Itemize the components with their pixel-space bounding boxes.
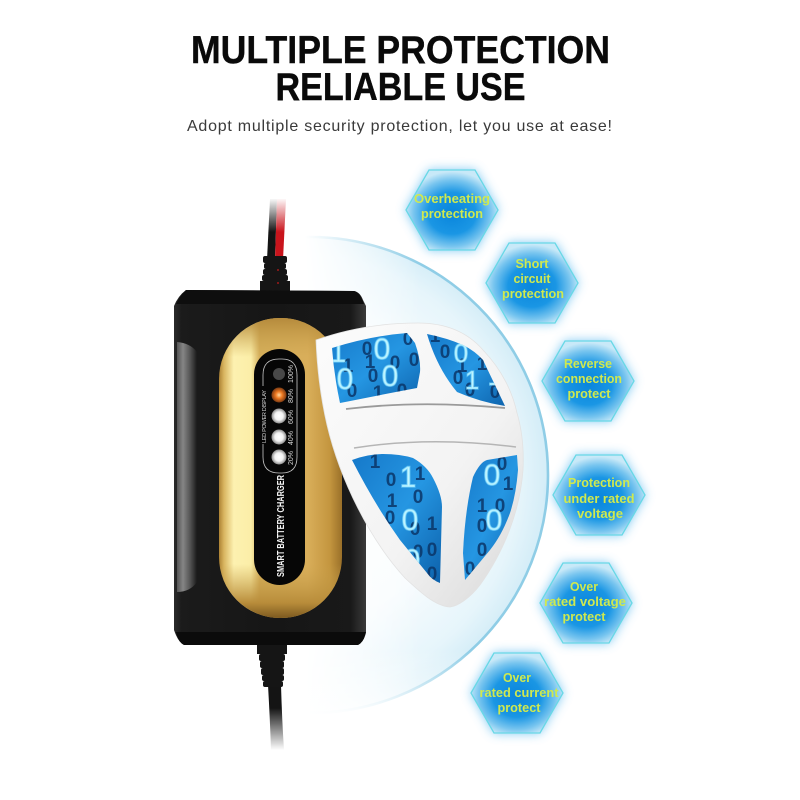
side highlight — [177, 342, 197, 592]
shield window: bottom right: 0 — [484, 459, 500, 492]
hexagon: protection under rated voltage: voltage — [577, 506, 623, 521]
shield window: bottom left: 0 — [427, 564, 437, 585]
shield window: bottom left: 0 — [410, 519, 420, 540]
hexagon: reverse connection protect: connection — [556, 371, 622, 386]
hexagon: over rated voltage protect: protect — [562, 609, 606, 624]
top cable — [260, 198, 292, 291]
shield window: bottom right: 0 — [465, 559, 475, 580]
hexagon: over rated voltage protect: rated voltage — [544, 594, 626, 609]
shield window: top left: 0 — [397, 381, 407, 402]
shield window: bottom left: 0 — [427, 540, 437, 561]
hexagon: over rated current protect: rated current — [480, 685, 559, 700]
shield window: bottom right: 0 — [477, 540, 487, 561]
shield window: top left: 0 — [390, 353, 400, 374]
shield window: top right: 1 — [457, 356, 468, 377]
hexagon: short circuit protection — [486, 243, 578, 323]
hexagon: over rated voltage protect: Over — [570, 579, 598, 594]
shield window: top right: 1 — [488, 361, 502, 391]
shield window: top left: 0 — [347, 381, 357, 402]
shield window: top left: 1 — [373, 383, 384, 404]
shield window: top left: 0 — [374, 333, 390, 366]
hexagon: over rated current protect: Over — [503, 670, 531, 685]
top strain relief — [260, 256, 290, 291]
title — [191, 29, 610, 109]
LED power display label: LED POWER DISPLAY — [262, 390, 268, 443]
LED percent labels: 60% — [288, 410, 295, 424]
LED percent labels: 80% — [288, 389, 295, 403]
gold panel — [219, 318, 342, 618]
product name: SMART BATTERY CHARGER — [275, 475, 287, 577]
shield window: top left: 0 — [368, 366, 378, 387]
title: MULTIPLE PROTECTION — [191, 29, 610, 72]
shield window: top left: 0 — [337, 363, 353, 396]
shield window: bottom right: 0 — [495, 496, 505, 517]
shield window: top left — [332, 333, 420, 403]
shield window: bottom left: 0 — [402, 504, 418, 537]
shield window: bottom right — [463, 455, 518, 580]
protection arc background — [314, 236, 550, 708]
shield window: top right: 1 — [477, 354, 488, 375]
LED indicators — [272, 368, 286, 464]
hexagon: protection under rated voltage — [553, 455, 645, 535]
hexagon: over rated current protect: protect — [498, 700, 541, 715]
hexagon: reverse connection protect: Reverse — [564, 356, 612, 371]
title: RELIABLE USE — [276, 66, 526, 109]
shield window: bottom right: 1 — [477, 496, 488, 517]
shield window: bottom left: 1 — [427, 514, 438, 535]
hexagon: over rated current protect — [471, 653, 563, 733]
shield window: top right: 0 — [454, 338, 468, 368]
shield window: bottom left: 0 — [385, 508, 395, 529]
shield window: top right: 1 — [465, 365, 479, 395]
hexagon: protection under rated voltage: under rated — [564, 491, 635, 506]
shield window: bottom right: 1 — [503, 474, 514, 495]
shield window: top left: 1 — [343, 356, 354, 377]
hexagon: short circuit protection: protection — [502, 286, 564, 301]
shield window: top right: 1 — [430, 326, 441, 347]
shield window: bottom left: 1 — [415, 464, 426, 485]
LED percent labels: 40% — [288, 431, 295, 445]
shield window: top right: 0 — [440, 342, 450, 363]
hexagon: over rated voltage protect — [540, 563, 632, 643]
shield window: top left: 1 — [330, 336, 346, 369]
shield window: top right: 0 — [490, 382, 500, 403]
hexagon: overheating protection: protection — [421, 206, 483, 221]
shield window: top right: 0 — [453, 368, 463, 389]
hexagon: overheating protection: Overheating — [414, 191, 490, 206]
shield window: top left: 0 — [409, 350, 419, 371]
shield window: bottom left: 1 — [400, 461, 416, 494]
shield window: bottom left: 0 — [404, 544, 420, 577]
LED percent labels — [288, 365, 295, 465]
shield window: bottom right: 0 — [477, 516, 487, 537]
hexagon: overheating protection — [406, 170, 498, 250]
shield window: bottom left: 0 — [413, 487, 423, 508]
LED percent labels: 100% — [288, 365, 295, 383]
shield window: bottom left: 0 — [386, 470, 396, 491]
LED percent labels: 20% — [288, 451, 295, 465]
subtitle: Adopt multiple security protection, let you use at ease! — [187, 118, 612, 135]
hexagon: reverse connection protect — [542, 341, 634, 421]
shield window: bottom left: 1 — [387, 491, 398, 512]
hexagon: reverse connection protect: protect — [568, 386, 611, 401]
top bevel — [176, 290, 364, 304]
shield window: top left: 0 — [382, 360, 398, 393]
shield window: top right: 0 — [465, 380, 475, 401]
shield window: top right — [427, 334, 505, 406]
shield window: top left: 1 — [365, 352, 376, 373]
shield — [316, 323, 523, 607]
shield grooves — [346, 404, 505, 409]
hexagon: protection under rated voltage: Protection — [568, 475, 630, 490]
shield window: bottom right: 0 — [486, 504, 502, 537]
LED bracket — [263, 359, 297, 473]
bottom strain relief — [257, 644, 287, 687]
hexagon: short circuit protection: Short — [516, 256, 549, 271]
shield window: bottom left: 1 — [370, 452, 381, 473]
charger body — [174, 290, 366, 645]
shield window: top left: 0 — [362, 339, 372, 360]
shield window: top left: 0 — [403, 329, 413, 350]
hexagon: short circuit protection: circuit — [514, 271, 551, 286]
bottom bevel — [176, 632, 366, 645]
shield window: bottom right: 0 — [497, 454, 507, 475]
shield window: bottom left — [350, 450, 445, 585]
bottom cable — [257, 644, 292, 750]
black display panel — [254, 349, 305, 585]
shield window: bottom left: 0 — [413, 542, 423, 563]
